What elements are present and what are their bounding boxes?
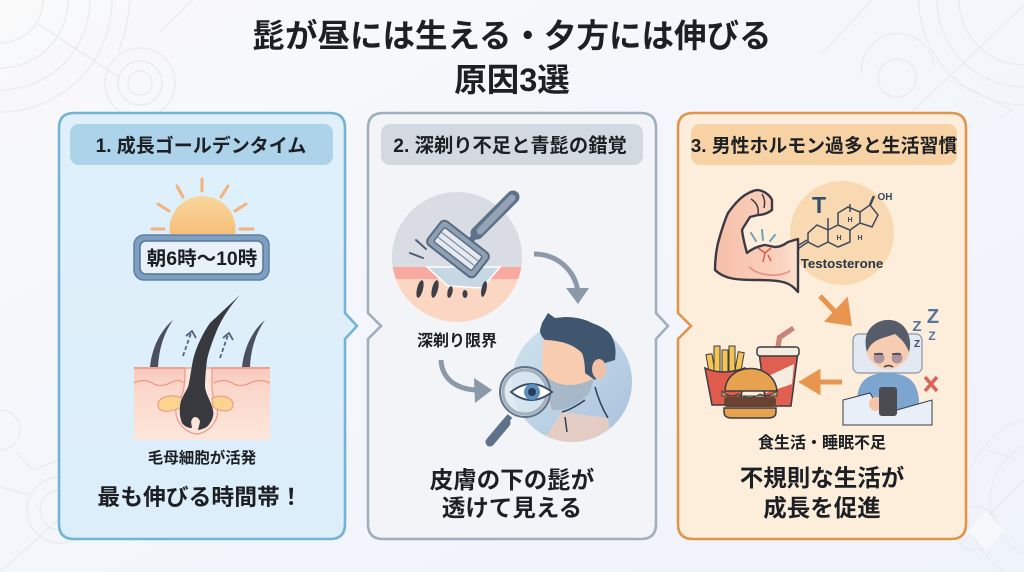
panel 2 heading: 2. 深剃り不足と青髭の錯覚 [393, 135, 627, 157]
title [252, 17, 772, 98]
panel 1: golden time [59, 113, 357, 539]
icon: testosterone molecule: H [857, 235, 863, 242]
panel 1 heading [70, 124, 333, 165]
icon: man in bed with phone: Z [928, 329, 936, 343]
icon: testosterone molecule: Testosterone [801, 256, 883, 271]
icon: man in bed with phone [843, 306, 939, 425]
arrow: razor to face [534, 254, 589, 304]
time badge: 朝6時〜10時 [147, 248, 257, 270]
arrow: limit to magnifier [441, 360, 492, 403]
icon: fast food [705, 326, 799, 418]
icon: rising sun [150, 178, 254, 234]
icon: man in bed with phone: Z [914, 339, 920, 350]
panel 3: testosterone and lifestyle [678, 113, 966, 539]
illustration: man with magnifying glass [490, 313, 632, 445]
icon: corner sparkle [968, 512, 1004, 550]
icon: testosterone molecule: OH [878, 192, 892, 203]
panel 1 heading: 1. 成長ゴールデンタイム [96, 134, 306, 157]
icon: man in bed with phone: Z [912, 318, 922, 335]
icon: razor on skin [392, 192, 522, 327]
callout: beard visible beneath skin: 皮膚の下の髭が [430, 466, 595, 493]
callout: peak time: 最も伸びる時間帯！ [97, 484, 303, 510]
title: 髭が昼には生える・夕方には伸びる [252, 17, 772, 54]
callout: irregular lifestyle: 不規則な生活が [740, 464, 905, 491]
panel 3 heading: 3. 男性ホルモン過多と生活習慣 [691, 135, 957, 157]
callout: irregular lifestyle [740, 464, 905, 521]
panel 2 heading [381, 124, 643, 165]
icon: testosterone molecule: O [792, 244, 800, 255]
icon: testosterone molecule [790, 181, 894, 285]
panel 3 heading [691, 124, 957, 165]
callout: irregular lifestyle: 成長を促進 [763, 495, 881, 521]
diagram: hair growing from follicle [134, 295, 270, 440]
time badge [134, 235, 269, 280]
icon: testosterone molecule: T [812, 192, 826, 218]
icon: flexed arm [715, 190, 798, 292]
arrow: to junk food [803, 373, 842, 391]
caption: active cells: 毛母細胞が活発 [148, 448, 257, 467]
caption: shaving limit: 深剃り限界 [417, 331, 497, 350]
icon: testosterone molecule: H [847, 217, 853, 224]
title: 原因3選 [454, 62, 570, 98]
arrow: to sleep [820, 296, 849, 323]
icon: testosterone molecule: H [836, 235, 842, 242]
icon: man in bed with phone: Z [927, 306, 939, 328]
callout: beard visible beneath skin [430, 466, 595, 521]
caption: diet and lack of sleep: 食生活・睡眠不足 [758, 433, 886, 452]
callout: beard visible beneath skin: 透けて見える [442, 495, 582, 521]
panel 2: shaving limit and blue beard illusion [368, 113, 668, 539]
